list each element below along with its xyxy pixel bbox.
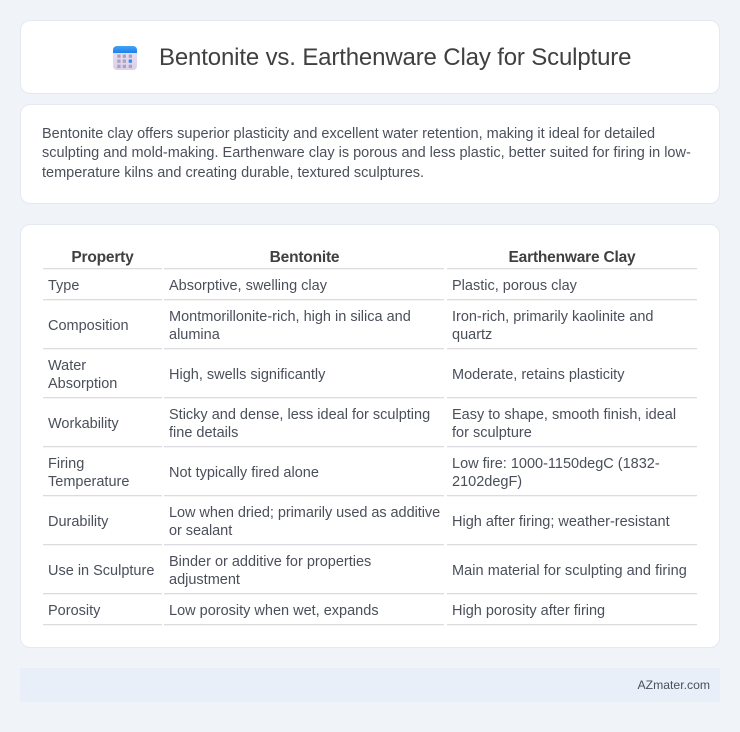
header: Property: Property <box>71 249 134 266</box>
title card <box>20 20 720 94</box>
title: Bentonite vs. Earthenware Clay for Sculpture <box>159 44 631 71</box>
comparison table: Plastic, porous clay <box>452 278 577 294</box>
header: Earthenware Clay: Earthenware Clay <box>509 249 635 266</box>
row: Durability: Durability <box>48 514 108 530</box>
row: Water Absorption: Water <box>48 358 86 374</box>
comparison table: High after firing; weather-resistant <box>452 514 670 530</box>
comparison table: fine details <box>169 425 238 441</box>
comparison table: High, swells significantly <box>169 367 325 383</box>
row: Porosity: Porosity <box>48 603 100 619</box>
intro text <box>42 126 691 181</box>
row: Firing Temperature: Firing <box>48 456 84 472</box>
row: Water Absorption: Absorption <box>48 376 117 392</box>
comparison table: quartz <box>452 327 492 343</box>
comparison table: Montmorillonite-rich, high in silica and <box>169 309 411 325</box>
comparison table: Iron-rich, primarily kaolinite and <box>452 309 653 325</box>
comparison table: High porosity after firing <box>452 603 605 619</box>
row: Type: Type <box>48 278 79 294</box>
footer bar <box>20 668 720 702</box>
comparison table: Moderate, retains plasticity <box>452 367 624 383</box>
intro text: temperature kilns and creating durable, textured sculptures. <box>42 165 424 181</box>
comparison table: Binder or additive for properties <box>169 554 371 570</box>
header: Bentonite: Bentonite <box>270 249 339 266</box>
intro text: sculpting and mold-making. Earthenware clay is porous and less plastic, better suited for firing in low- <box>42 145 691 161</box>
intro card <box>20 104 720 204</box>
comparison table: Low porosity when wet, expands <box>169 603 379 619</box>
icon: calendar <box>113 46 137 70</box>
table card <box>20 224 720 648</box>
comparison table: Not typically fired alone <box>169 465 319 481</box>
comparison table: 2102degF) <box>452 474 522 490</box>
comparison table: Main material for sculpting and firing <box>452 563 687 579</box>
comparison table: Absorptive, swelling clay <box>169 278 327 294</box>
row: Firing Temperature <box>48 456 129 490</box>
comparison table: Low when dried; primarily used as additive <box>169 505 440 521</box>
comparison table: alumina <box>169 327 220 343</box>
comparison table: or sealant <box>169 523 232 539</box>
intro text: Bentonite clay offers superior plasticity and excellent water retention, making it ideal for detailed <box>42 126 655 142</box>
row: Workability: Workability <box>48 416 119 432</box>
row: Firing Temperature: Temperature <box>48 474 129 490</box>
comparison table: adjustment <box>169 572 240 588</box>
row: Use in Sculpture: Use in Sculpture <box>48 563 154 579</box>
comparison table: Easy to shape, smooth finish, ideal <box>452 407 676 423</box>
comparison table: Low fire: 1000-1150degC (1832- <box>452 456 660 472</box>
comparison table: for sculpture <box>452 425 532 441</box>
row: Composition: Composition <box>48 318 129 334</box>
footer credit: AZmater.com <box>638 678 710 692</box>
row: Water Absorption <box>48 358 117 392</box>
comparison table: Sticky and dense, less ideal for sculpting <box>169 407 430 423</box>
